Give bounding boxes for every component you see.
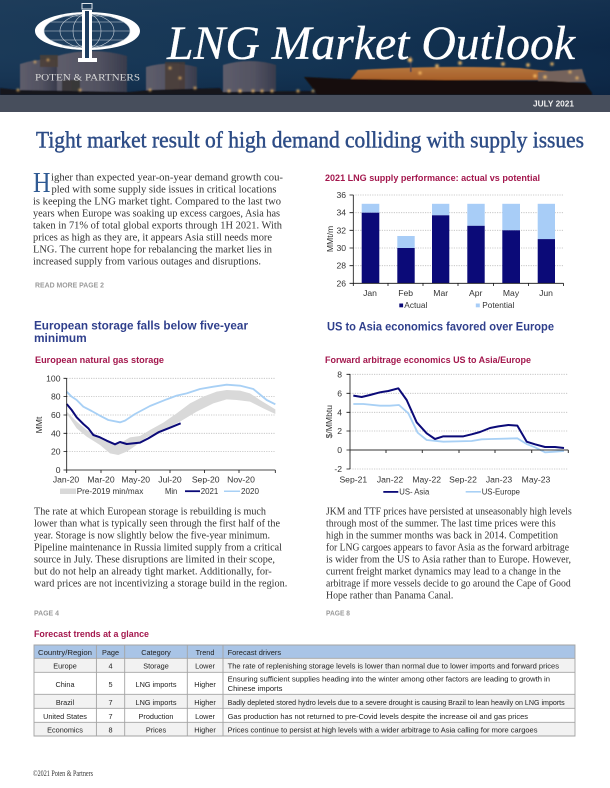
text block: economics commentary: arbitrage if more vessels decide to go around the Cape of Good [326, 579, 571, 590]
bar chart: actual vs potential: 36 [336, 190, 346, 200]
row: China: Ensuring sufficient supplies heading into the winter among other factors are leading to growth in [228, 674, 550, 684]
legend: Pre-2019 min/max [77, 486, 144, 496]
line chart: arbitrage: 8 [337, 369, 342, 379]
text block: storage commentary [34, 507, 287, 590]
line chart: arbitrage: 6 [337, 388, 342, 398]
line chart: arbitrage: May-23 [522, 474, 551, 484]
legend [399, 300, 514, 310]
bar chart: actual vs potential: Apr [469, 288, 483, 298]
logo: globe emblem [35, 4, 140, 62]
row: Economics: Higher [194, 725, 216, 734]
row: Economics: 8 [108, 725, 113, 734]
text block: market summary: taken in 71% of total global exports through 1H 2021. With [33, 220, 283, 232]
table header row: Category [141, 648, 171, 657]
line chart: arbitrage: May-22 [412, 474, 441, 484]
text block: economics commentary: high in the summer months was back in 2014. Competition [326, 531, 559, 542]
row: United States: Production [139, 712, 173, 721]
page reference: PAGE 8 [326, 611, 350, 618]
line chart: arbitrage: 0 [337, 445, 342, 455]
table header row: Trend [196, 648, 214, 657]
row: China: Chinese imports [228, 684, 283, 693]
row: United States: United States [43, 712, 87, 721]
text block: market summary: increased supply from various outages and disruptions. [33, 256, 261, 268]
line chart: storage [34, 373, 275, 484]
row: Economics: Economics [47, 725, 83, 734]
line chart: storage: Mar-20 [87, 474, 115, 484]
row: Brazil: 7 [108, 698, 113, 707]
row: China: LNG imports [136, 680, 177, 689]
section heading: European storage [34, 320, 249, 345]
line chart: storage: Jan-20 [53, 474, 79, 484]
2020 line [67, 385, 275, 422]
table header row: Country/Region [38, 648, 92, 657]
text block: market summary: prices as high as they are, it appears Asia still needs more [33, 232, 272, 244]
bar chart: actual vs potential: 28 [336, 261, 346, 271]
text block: market summary: igher than expected year-on-year demand growth cou- [51, 172, 284, 184]
text block: economics commentary [326, 507, 572, 602]
line chart: arbitrage: Jan-22 [377, 474, 403, 484]
logo wordmark: POTEN & PARTNERS [35, 72, 140, 82]
panel: supply performance chart [325, 173, 564, 310]
line chart: storage: 0 [56, 465, 61, 475]
bar chart: actual vs potential: 32 [336, 225, 346, 235]
footer copyright: ©2021 Poten & Partners [33, 769, 93, 778]
legend: 2020 [241, 486, 259, 496]
bar chart: actual vs potential: Mar [433, 288, 448, 298]
date bar: JULY 2021 [533, 100, 575, 108]
US-Europe line [353, 404, 564, 452]
legend: Actual [404, 300, 427, 310]
row: China: Higher [194, 680, 216, 689]
line chart: storage: May-20 [121, 474, 150, 484]
line chart: storage: 40 [51, 428, 61, 438]
bar chart: actual vs potential: MMt/m [325, 226, 335, 252]
row: China: China [55, 680, 75, 689]
table header row: Page [102, 648, 119, 657]
bar chart: actual vs potential: 30 [336, 243, 346, 253]
table heading: Forecast trends at a glance [34, 629, 149, 639]
row: Brazil: LNG imports [136, 698, 177, 707]
row: Brazil: Brazil [56, 698, 74, 707]
text block: economics commentary: through most of the summer. The last time prices were this [326, 519, 556, 530]
line chart: arbitrage [324, 369, 568, 484]
2021 line [67, 404, 181, 444]
row: China: 5 [108, 680, 113, 689]
row: Europe [34, 658, 575, 672]
row: Brazil: Higher [194, 698, 216, 707]
text block: storage commentary: but do not help an already tight market. Additionally, for- [34, 567, 272, 578]
legend: US-Europe [482, 486, 520, 496]
row: United States [34, 708, 575, 722]
header banner [0, 0, 610, 112]
page reference: PAGE 4 [34, 611, 59, 618]
line chart: arbitrage: Sep-21 [339, 474, 367, 484]
panel: forward arbitrage chart [324, 355, 568, 496]
line chart: storage: 80 [51, 392, 61, 402]
banner photo: LNG terminal and tanker at night [0, 0, 610, 95]
text block: storage commentary: lower than what is typically seen through the first half of the [34, 519, 280, 530]
section heading: US to Asia: US to Asia economics favored over Europe [327, 322, 554, 334]
bar chart: actual vs potential: Feb [398, 288, 413, 298]
text block: storage commentary: Pipeline maintenance in Russia limited supply from a critical [34, 543, 282, 554]
text block: economics commentary: JKM and TTF prices have persisted at unseasonably high levels [326, 507, 572, 518]
row: Economics [34, 722, 575, 736]
row: Europe: Storage [143, 662, 169, 671]
text block: economics commentary: Hope rather than Panama Canal. [326, 591, 453, 602]
text block: market summary: pled with some supply side issues in critical locations [52, 184, 276, 196]
line chart: arbitrage: Jan-23 [486, 474, 512, 484]
legend [383, 486, 520, 496]
pre-2019 band [67, 390, 275, 455]
bar chart: actual vs potential [325, 190, 564, 298]
chart title: Forward arbitrage economics US to Asia/Europe [325, 355, 531, 365]
line chart: arbitrage: -2 [334, 464, 342, 474]
date bar [0, 95, 610, 112]
line chart: storage: MMt [34, 416, 44, 433]
line chart: arbitrage: 4 [337, 407, 342, 417]
line chart: storage: Nov-20 [227, 474, 255, 484]
line chart: storage: 100 [46, 373, 61, 383]
section heading: European storage: minimum [34, 333, 87, 345]
text block: market summary: years when Europe was soaking up excess cargoes, Asia has [33, 208, 280, 220]
row: Economics: Prices continue to persist at high levels with a wider arbitrage to Asia calling for more cargoes [228, 725, 538, 734]
row: Brazil [34, 694, 575, 708]
line chart: arbitrage: Sep-22 [449, 474, 477, 484]
main headline: Tight market result of high demand colliding with supply issues [36, 128, 584, 152]
row: United States: Lower [195, 712, 216, 721]
row: Europe: Europe [53, 662, 77, 671]
text block: market summary: LNG. The current hope for rebalancing the market lies in [33, 244, 273, 256]
text block: economics commentary: for LNG cargoes appears to favor Asia as the forward arbitrage [326, 543, 569, 554]
chart title: European natural gas storage [35, 355, 164, 365]
row: United States: Gas production has not returned to pre-Covid levels despite the increase oil and gas prices [228, 712, 528, 721]
row: Economics: Prices [146, 725, 166, 734]
line chart: storage: 20 [51, 447, 61, 457]
read more link: READ MORE PAGE 2 [35, 282, 104, 290]
text block: market summary [33, 167, 284, 268]
table header row: Forecast drivers [228, 648, 281, 657]
text block: market summary: is keeping the LNG market tight. Compared to the last two [33, 196, 281, 208]
legend: 2021 [201, 486, 218, 496]
Poten and Partners logo [35, 4, 140, 82]
line chart: arbitrage: 2 [337, 426, 342, 436]
text block: storage commentary: source in July. These disruptions are limited in their scope, [34, 555, 275, 566]
legend: Potential [482, 300, 514, 310]
line chart: storage: Sep-20 [192, 474, 220, 484]
bar chart: actual vs potential: Jan [363, 288, 377, 298]
legend [60, 486, 259, 496]
row: United States: 7 [108, 712, 113, 721]
line chart: storage: 60 [51, 410, 61, 420]
row: Brazil: Badly depleted stored hydro levels due to a severe drought is causing Brazil to lean heavily on LNG imports [228, 698, 565, 707]
text block: storage commentary: The rate at which European storage is rebuilding is much [34, 507, 267, 518]
table header row [34, 645, 575, 658]
US-Asia line [353, 388, 564, 448]
legend: Min [165, 486, 177, 496]
text block: storage commentary: ward prices are not incentivizing a storage build in the region. [34, 579, 287, 590]
bar chart: actual vs potential: May [503, 288, 520, 298]
panel: forecast table [34, 645, 575, 736]
row: Europe: Lower [195, 662, 216, 671]
section heading: European storage: European storage falls below five-year [34, 320, 249, 332]
panel: European gas storage chart [34, 355, 275, 496]
text block: economics commentary: current freight market dynamics may lead to a change in the [326, 567, 561, 578]
row: Europe: The rate of replenishing storage levels is lower than normal due to lower imports and forward prices [228, 662, 559, 671]
line chart: arbitrage: $/MMbtu [324, 405, 334, 438]
bar chart: actual vs potential: 26 [336, 278, 346, 288]
drop cap: H [33, 167, 51, 199]
bar chart: actual vs potential: Jun [539, 288, 553, 298]
bar chart: actual vs potential: 34 [336, 208, 346, 218]
row: Europe: 4 [108, 662, 113, 671]
chart title: 2021 LNG supply performance: actual vs potential [325, 173, 540, 183]
row: China [34, 672, 575, 694]
text block: economics commentary: is wider from the US to Asia rather than to Europe. However, [326, 555, 571, 566]
line chart: storage: Jul-20 [158, 474, 182, 484]
text block: storage commentary: year. Storage is now slightly below the five-year minimum. [34, 531, 270, 542]
publication title: LNG Market Outlook [166, 17, 577, 70]
legend: US- Asia [399, 486, 429, 496]
